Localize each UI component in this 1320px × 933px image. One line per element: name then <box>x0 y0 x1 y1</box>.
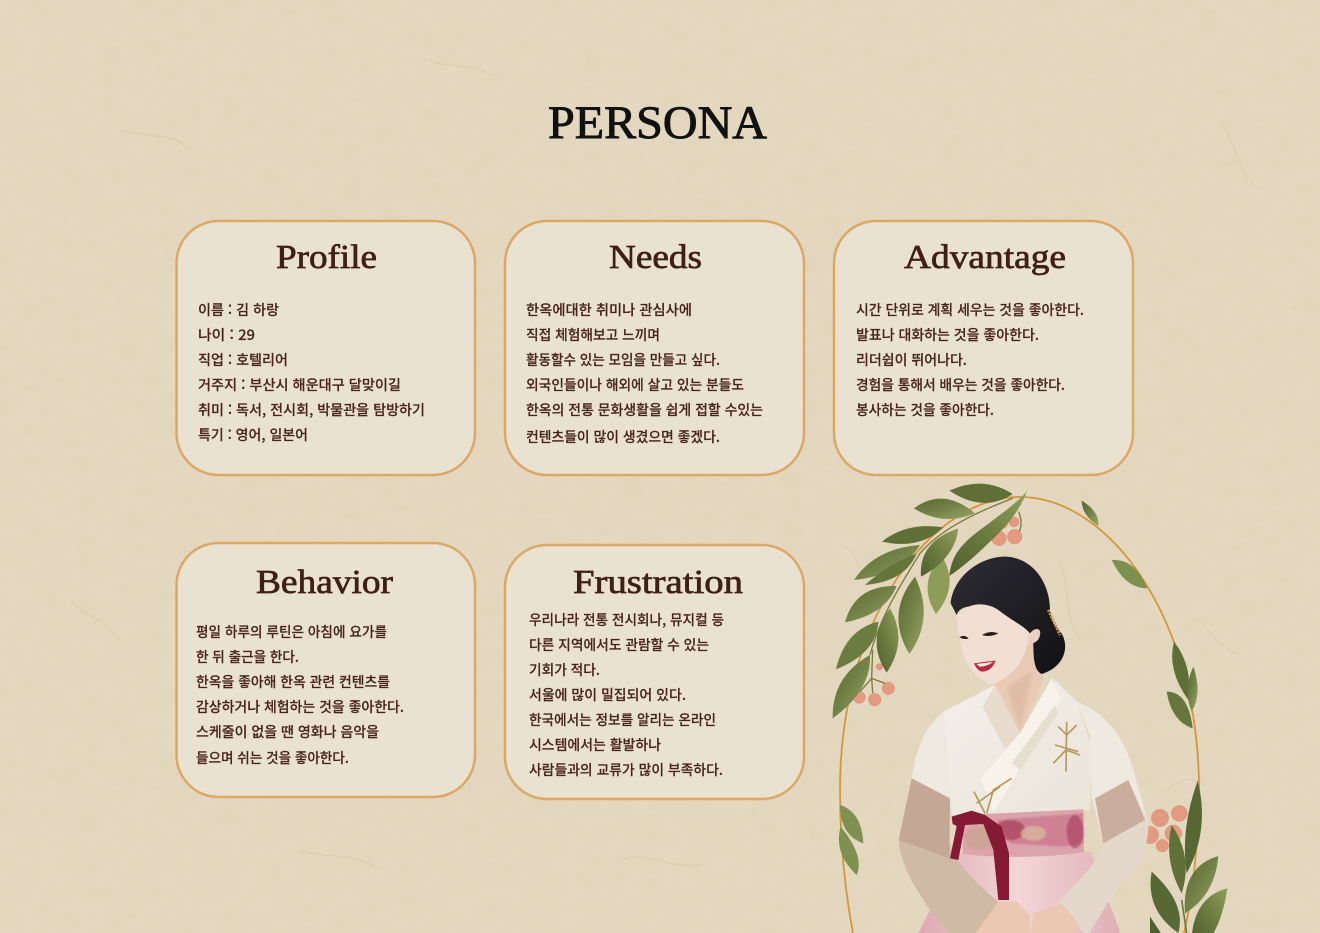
text: advantage details: 리더쉽이 뛰어나다. <box>856 350 967 370</box>
text: profile details: 직업 : 호텔리어 <box>198 350 288 370</box>
text: needs details: 컨텐츠들이 많이 생겼으면 좋겠다. <box>526 427 720 447</box>
text: behavior details: 평일 하루의 루틴은 아침에 요가를 <box>196 622 387 642</box>
berries upper <box>853 517 1022 706</box>
ear <box>1027 629 1040 645</box>
brooches <box>974 722 1080 813</box>
text: behavior details: 스케줄이 없을 땐 영화나 음악을 <box>196 722 379 742</box>
text: frustration details: 사람들과의 교류가 많이 부족하다. <box>529 760 723 780</box>
text: behavior details <box>196 622 404 768</box>
jeogori body <box>943 680 1092 815</box>
text: frustration details: 한국에서는 정보를 알리는 온라인 <box>529 710 716 730</box>
right sleeve <box>1058 702 1148 933</box>
heading: profile: Profile <box>276 239 377 276</box>
hands <box>973 902 1031 933</box>
title: PERSONA <box>548 97 767 149</box>
leaves: bottom right <box>1150 781 1227 933</box>
text: needs details: 한옥에대한 취미나 관심사에 <box>526 300 692 320</box>
panel: behavior <box>176 543 475 797</box>
text: advantage details: 발표나 대화하는 것을 좋아한다. <box>856 325 1039 345</box>
eyes and lips <box>959 632 998 672</box>
leaves: top branch <box>833 484 1027 718</box>
woman figure <box>899 557 1148 933</box>
stems <box>860 498 1021 693</box>
leaves: right arc <box>1082 501 1198 728</box>
botanical branches and woman <box>833 484 1227 933</box>
text: behavior details: 한옥을 좋아해 한옥 관련 컨텐츠를 <box>196 672 390 692</box>
panel: profile <box>176 221 475 475</box>
illustration: woman in hanbok with botanical frame <box>833 484 1227 933</box>
leaves: left lower <box>839 805 863 875</box>
ribbon bow <box>950 811 1009 900</box>
panel: needs <box>505 221 804 475</box>
text: profile details <box>198 300 425 445</box>
text: frustration details: 시스템에서는 활발하나 <box>529 735 661 755</box>
collar <box>983 685 1020 749</box>
hair back <box>951 557 1065 674</box>
text: behavior details: 한 뒤 출근을 한다. <box>196 647 299 667</box>
text: advantage details: 시간 단위로 계획 세우는 것을 좋아한다. <box>856 300 1084 320</box>
right lower berries <box>1141 805 1187 852</box>
text: frustration details: 서울에 많이 밀집되어 있다. <box>529 685 686 705</box>
text: profile details: 거주지 : 부산시 해운대구 달맞이길 <box>198 375 401 395</box>
heading: needs: Needs <box>609 239 702 276</box>
neck <box>993 640 1044 734</box>
text: needs details <box>526 300 763 447</box>
face <box>956 604 1032 684</box>
text: advantage details: 경험을 통해서 배우는 것을 좋아한다. <box>856 375 1065 395</box>
text: frustration details: 우리나라 전통 전시회나, 뮤지컬 등 <box>529 610 724 630</box>
panel: advantage <box>834 221 1133 475</box>
heading: behavior: Behavior <box>256 564 394 601</box>
text: frustration details: 다른 지역에서도 관람할 수 있는 <box>529 635 709 655</box>
text: profile details: 취미 : 독서, 전시회, 박물관을 탐방하기 <box>198 400 425 420</box>
text: behavior details: 감상하거나 체험하는 것을 좋아한다. <box>196 697 404 717</box>
text: needs details: 활동할수 있는 모임을 만들고 싶다. <box>526 350 720 370</box>
heading: frustration: Frustration <box>573 564 743 601</box>
text: advantage details <box>856 300 1084 420</box>
waistband with embroidery <box>963 809 1084 857</box>
heading: advantage: Advantage <box>904 239 1066 276</box>
text: profile details: 나이 : 29 <box>198 325 255 345</box>
oval frame <box>840 497 1199 933</box>
hair pin <box>1048 610 1060 635</box>
text: advantage details: 봉사하는 것을 좋아한다. <box>856 400 994 420</box>
left sleeve <box>899 712 998 933</box>
text: needs details: 한옥의 전통 문화생활을 쉽게 접할 수있는 <box>526 400 763 420</box>
text: needs details: 직접 체험해보고 느끼며 <box>526 325 660 345</box>
skirt <box>917 852 1122 933</box>
text: profile details: 이름 : 김 하랑 <box>198 300 279 320</box>
text: frustration details <box>529 610 724 780</box>
text: frustration details: 기회가 적다. <box>529 660 600 680</box>
text: needs details: 외국인들이나 해외에 살고 있는 분들도 <box>526 375 744 395</box>
text: profile details: 특기 : 영어, 일본어 <box>198 425 308 445</box>
text: behavior details: 들으며 쉬는 것을 좋아한다. <box>196 748 349 768</box>
panel: frustration <box>505 545 804 799</box>
